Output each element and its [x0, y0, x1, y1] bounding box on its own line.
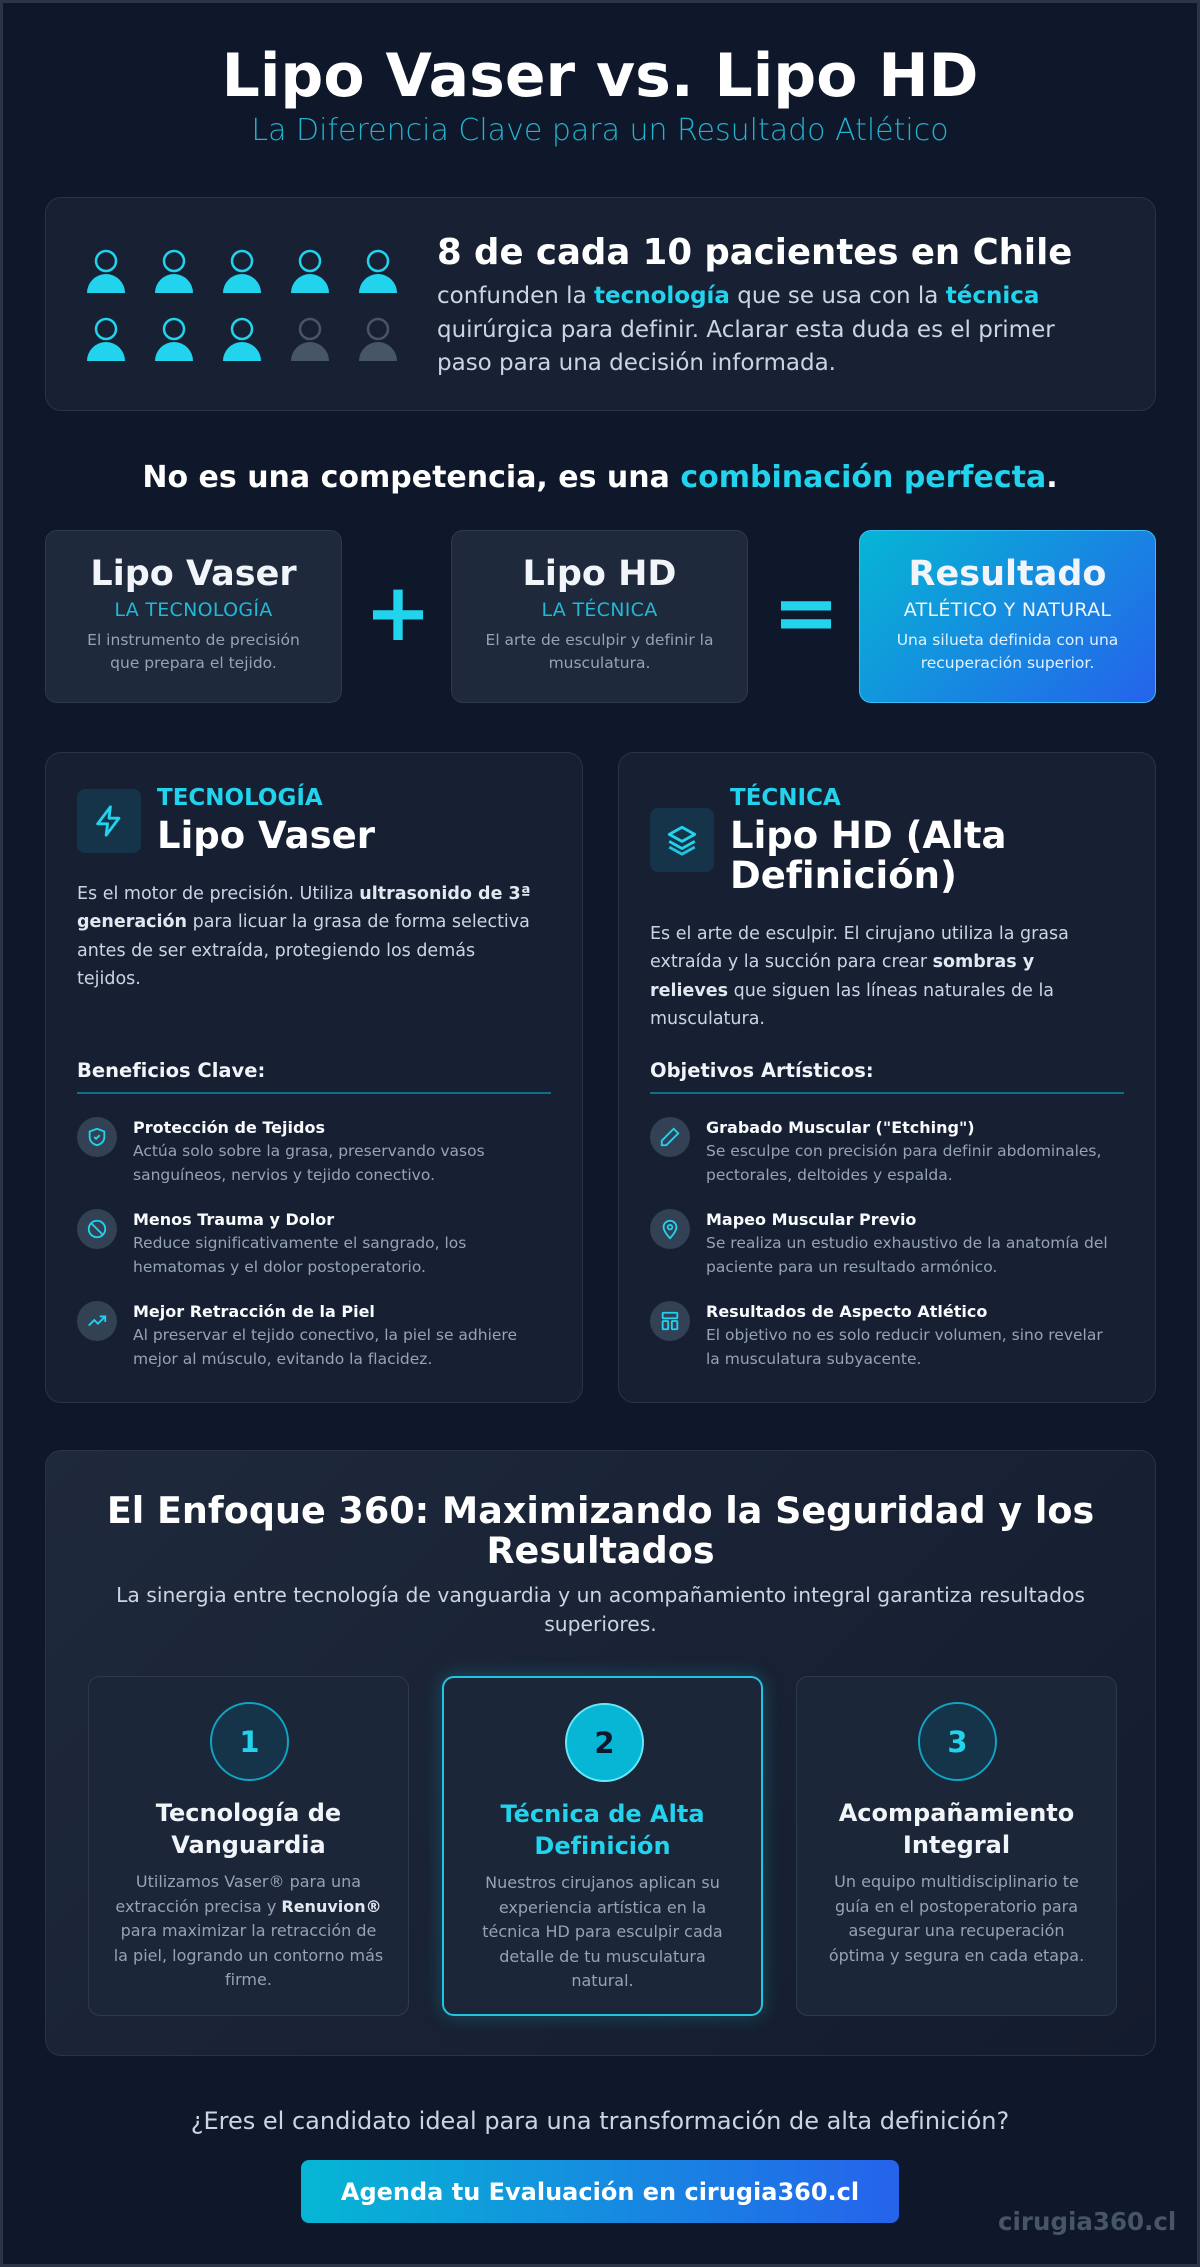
- step 2: Nuestros cirujanos aplican su experiencia artística en la técnica HD para esculpir cada detalle de tu musculatura natural.: [482, 1873, 723, 1990]
- benefit 2: [77, 1209, 466, 1276]
- step 2: [442, 1676, 763, 2016]
- benefit 1: Protección de Tejidos: [133, 1118, 325, 1137]
- card: Resultado: Una silueta definida con una recuperación superior.: [897, 631, 1118, 672]
- card: Lipo Vaser: [45, 530, 342, 703]
- step 1: Utilizamos Vaser® para una extracción precisa y Renuvion® para maximizar la retracción de la piel, logrando un contorno más firme.: [114, 1872, 383, 1989]
- step 1: Tecnología de Vanguardia: [156, 1799, 341, 1859]
- benefit 3: Al preservar el tejido conectivo, la piel se adhiere mejor al músculo, evitando la flacidez.: [133, 1326, 517, 1368]
- card title: Lipo HD (Alta: [730, 814, 1006, 857]
- label: TÉCNICA: [730, 785, 841, 811]
- stat heading: 8 de cada 10 pacientes en Chile: [437, 232, 1072, 273]
- step 3: [796, 1676, 1117, 2016]
- label: TECNOLOGÍA: [157, 785, 323, 811]
- card: Resultado: [859, 530, 1156, 703]
- subheading: Objetivos Artísticos:: [650, 1059, 874, 1082]
- step 3: 3: [947, 1724, 968, 1758]
- card: Lipo HD: Lipo HD: [523, 554, 676, 594]
- card title: Definición): [730, 854, 957, 897]
- goal 1: Grabado Muscular ("Etching"): [706, 1118, 975, 1137]
- goal 1: Se esculpe con precisión para definir abdominales, pectorales, deltoides y espalda.: [706, 1142, 1101, 1184]
- goal 2: [650, 1209, 1108, 1276]
- panel: statistic: [45, 197, 1156, 411]
- heading: combination: No es una competencia, es una combinación perfecta.: [142, 460, 1058, 495]
- goal 3: Resultados de Aspecto Atlético: [706, 1302, 987, 1321]
- goal 3: El objetivo no es solo reducir volumen, sino revelar la musculatura subyacente.: [706, 1326, 1103, 1368]
- step 3: Acompañamiento Integral: [839, 1799, 1074, 1859]
- benefit 2: Menos Trauma y Dolor: [133, 1210, 334, 1229]
- icon: people 8 of 10: [87, 250, 397, 361]
- card: Lipo HD: [451, 530, 748, 703]
- card title: [730, 814, 1006, 897]
- benefit 1: Actúa solo sobre la grasa, preservando vasos sanguíneos, nervios y tejido conectivo.: [133, 1142, 485, 1184]
- panel: Enfoque 360: [45, 1450, 1156, 2056]
- card: Resultado: Resultado: [909, 554, 1106, 594]
- panel: Lipo HD technique: [618, 752, 1156, 1403]
- button: [301, 2160, 899, 2223]
- step 3: Un equipo multidisciplinario te guía en el postoperatorio para asegurar una recuperación óptima y segura en cada etapa.: [829, 1872, 1084, 1964]
- title: Lipo Vaser vs. Lipo HD: [222, 41, 978, 111]
- goal 2: Se realiza un estudio exhaustivo de la anatomía del paciente para un resultado armónico.: [706, 1234, 1108, 1276]
- card: Lipo Vaser: LA TECNOLOGÍA: [114, 599, 273, 621]
- step 1: [88, 1676, 409, 2016]
- goal 3: [650, 1301, 1103, 1368]
- subheading: Beneficios Clave:: [77, 1059, 265, 1082]
- card: Resultado: ATLÉTICO Y NATURAL: [904, 599, 1111, 621]
- step 2: Técnica de Alta Definición: [500, 1800, 705, 1860]
- goal 1: [650, 1117, 1101, 1184]
- icon: layers: [650, 808, 714, 872]
- button: Agenda tu Evaluación en cirugia360.cl: [341, 2178, 859, 2206]
- icon: plus: +: [364, 566, 432, 659]
- watermark: cirugia360.cl: [998, 2207, 1176, 2236]
- card title: Lipo Vaser: [157, 814, 375, 857]
- benefit 3: [77, 1301, 517, 1368]
- section title: El Enfoque 360: Maximizando la Seguridad y los Resultados: [107, 1489, 1094, 1572]
- panel: Lipo Vaser technology: [45, 752, 583, 1403]
- description: Es el motor de precisión. Utiliza ultrasonido de 3ª generación para licuar la grasa de forma selectiva antes de ser extraída, protegiendo los demás tejidos.: [77, 884, 531, 989]
- card: Lipo Vaser: El instrumento de precisión que prepara el tejido.: [87, 631, 300, 672]
- card: Lipo Vaser: Lipo Vaser: [90, 554, 297, 594]
- card: Lipo HD: LA TÉCNICA: [541, 599, 658, 621]
- step 1: 1: [239, 1724, 260, 1758]
- icon: equals: =: [772, 566, 840, 659]
- card: Lipo HD: El arte de esculpir y definir la musculatura.: [486, 631, 713, 672]
- benefit 1: [77, 1117, 485, 1184]
- icon: lightning: [77, 789, 141, 853]
- stat text: confunden la tecnología que se usa con la técnica quirúrgica para definir. Aclarar esta duda es el primer paso para una decisión informada.: [437, 283, 1055, 376]
- goal 2: Mapeo Muscular Previo: [706, 1210, 916, 1229]
- section subtitle: La sinergia entre tecnología de vanguardia y un acompañamiento integral garantiza resultados superiores.: [116, 1583, 1085, 1636]
- benefit 3: Mejor Retracción de la Piel: [133, 1302, 375, 1321]
- benefit 2: Reduce significativamente el sangrado, los hematomas y el dolor postoperatorio.: [133, 1234, 466, 1276]
- call to action question: ¿Eres el candidato ideal para una transformación de alta definición?: [191, 2107, 1009, 2135]
- subtitle: La Diferencia Clave para un Resultado Atlético: [251, 113, 949, 148]
- step 2: 2: [594, 1726, 615, 1760]
- description: Es el arte de esculpir. El cirujano utiliza la grasa extraída y la succión para crear sombras y relieves que siguen las líneas naturales de la musculatura.: [650, 924, 1069, 1029]
